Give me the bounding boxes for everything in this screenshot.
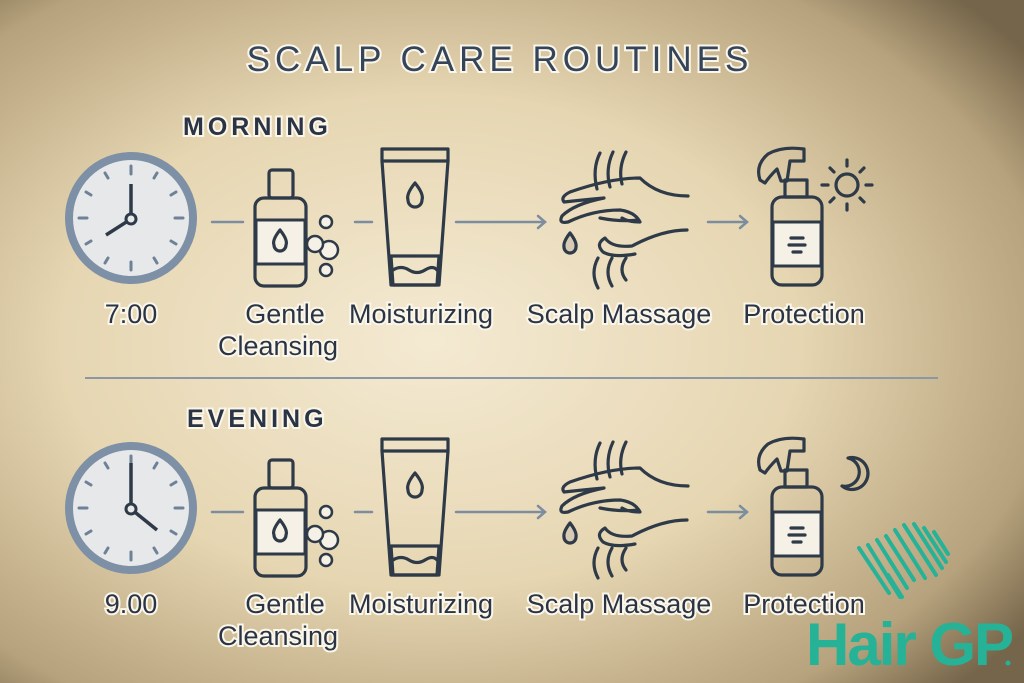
labels: morning steps: Cleansing — [218, 331, 338, 361]
labels: morning steps — [105, 299, 865, 361]
icon: clock 9.00 — [69, 446, 193, 570]
arrow — [212, 511, 243, 513]
labels: evening steps: 9.00 — [105, 589, 157, 619]
panel: evening routine — [69, 405, 868, 651]
icon: scalp massage hand — [561, 152, 688, 288]
arrow — [708, 216, 747, 228]
labels: evening steps: Moisturizing — [349, 589, 493, 619]
arrow — [456, 216, 545, 228]
labels: morning steps: Scalp Massage — [527, 299, 711, 329]
icon: shampoo bottle — [255, 460, 338, 576]
icon: moisturizer tube — [382, 439, 448, 575]
labels: morning steps: Protection — [743, 299, 865, 329]
icon: protection spray — [759, 148, 822, 285]
panel: morning routine — [69, 113, 822, 288]
icon: protection spray — [759, 438, 822, 575]
arrow — [212, 221, 243, 223]
heading: evening: EVENING — [187, 405, 328, 433]
icon: shampoo bottle — [255, 170, 338, 286]
icon: clock 7:00 — [69, 156, 193, 280]
labels: evening steps: Cleansing — [218, 621, 338, 651]
labels: evening steps: Scalp Massage — [527, 589, 711, 619]
labels: evening steps: Gentle — [245, 589, 325, 619]
icon: scalp massage hand — [561, 442, 688, 578]
labels: evening steps — [105, 589, 865, 651]
icon: sun — [822, 160, 872, 210]
heading: morning: MORNING — [183, 113, 332, 141]
icon: moon — [842, 457, 868, 489]
icon: moisturizer tube — [382, 149, 448, 285]
divider — [85, 377, 938, 379]
arrow — [456, 506, 545, 518]
labels: morning steps: Moisturizing — [349, 299, 493, 329]
title: SCALP CARE ROUTINES — [247, 40, 753, 79]
arrow — [355, 221, 372, 223]
arrow — [355, 511, 372, 513]
labels: evening steps: Protection — [743, 589, 865, 619]
logo: Hair GP: Hair GP — [806, 611, 1012, 678]
arrow — [708, 506, 747, 518]
logo: Hair GP — [806, 524, 1012, 678]
labels: morning steps: Gentle — [245, 299, 325, 329]
labels: morning steps: 7:00 — [105, 299, 157, 329]
